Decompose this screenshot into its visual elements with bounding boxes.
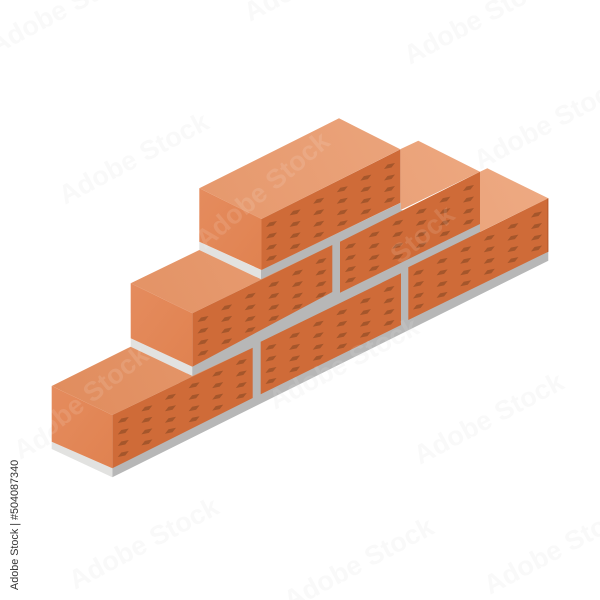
watermark on background: Adobe Stock — [409, 366, 569, 470]
stock credit text: Adobe Stock | #504087340 — [9, 460, 21, 590]
brick: second row right — [340, 141, 480, 293]
mortar: front grey layer — [112, 203, 548, 477]
watermark on background: Adobe Stock — [64, 491, 224, 595]
watermark over bricks: Adobe Stock — [190, 125, 336, 255]
watermark over bricks: Adobe Stock — [5, 339, 155, 465]
brick: bottom row middle — [261, 273, 401, 394]
watermark over bricks — [5, 125, 461, 465]
brick: bottom row left — [52, 347, 253, 468]
brick: far right, top row 3 — [408, 168, 548, 320]
watermark on background: Adobe Stock — [9, 361, 169, 465]
watermark on background: Adobe Stock — [54, 106, 214, 210]
watermark over bricks: Adobe Stock — [264, 311, 424, 415]
watermark over bricks: Stock — [385, 199, 461, 270]
brick: second row left — [131, 245, 332, 367]
watermark on background: Adobe Stock — [264, 311, 424, 415]
brick: top row — [199, 118, 400, 270]
mortar: left light strips — [52, 242, 261, 477]
